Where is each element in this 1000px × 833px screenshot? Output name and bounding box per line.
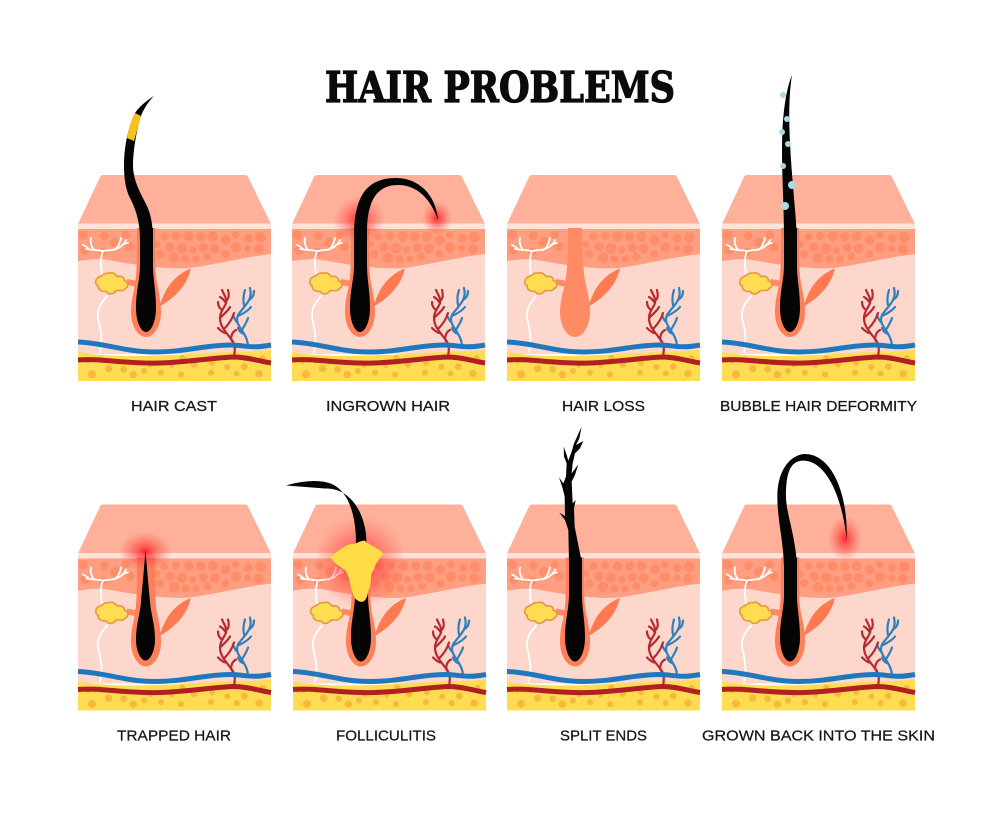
redness glow [118,532,172,572]
panel: ingrown hair [292,175,485,415]
label: hair loss: HAIR LOSS [562,398,645,415]
title: HAIR PROBLEMS [325,63,675,112]
bubbled hair strand [780,75,800,332]
label: bubble hair deformity: BUBBLE HAIR DEFORMITY [720,398,917,415]
label: folliculitis: FOLLICULITIS [336,728,436,744]
redness glow [317,520,403,603]
label: ingrown hair: INGROWN HAIR [326,398,450,415]
panel: split ends [507,427,700,744]
hair strand [286,481,371,662]
split hair strand [559,427,585,662]
curved hair strand [777,454,847,662]
panel: hair loss [507,175,700,415]
panel: trapped hair [78,504,271,744]
ingrown hair strand [350,178,438,332]
label: hair cast: HAIR CAST [131,398,217,415]
hair strand with cast [124,96,156,332]
pus pustule [330,541,383,602]
panel: bubble hair deformity [720,75,917,415]
bubbles [779,92,796,210]
label: split ends: SPLIT ENDS [560,728,647,744]
trapped hair strand [136,550,155,660]
panel: grown back into the skin [702,454,935,744]
redness glow [828,516,862,562]
empty follicle [560,228,590,337]
label: grown back into the skin: GROWN BACK INTO THE SKIN [702,728,935,744]
label: trapped hair: TRAPPED HAIR [117,728,231,744]
panel: hair cast [78,96,271,415]
redness glows [333,196,452,244]
panel: folliculitis [286,481,486,744]
